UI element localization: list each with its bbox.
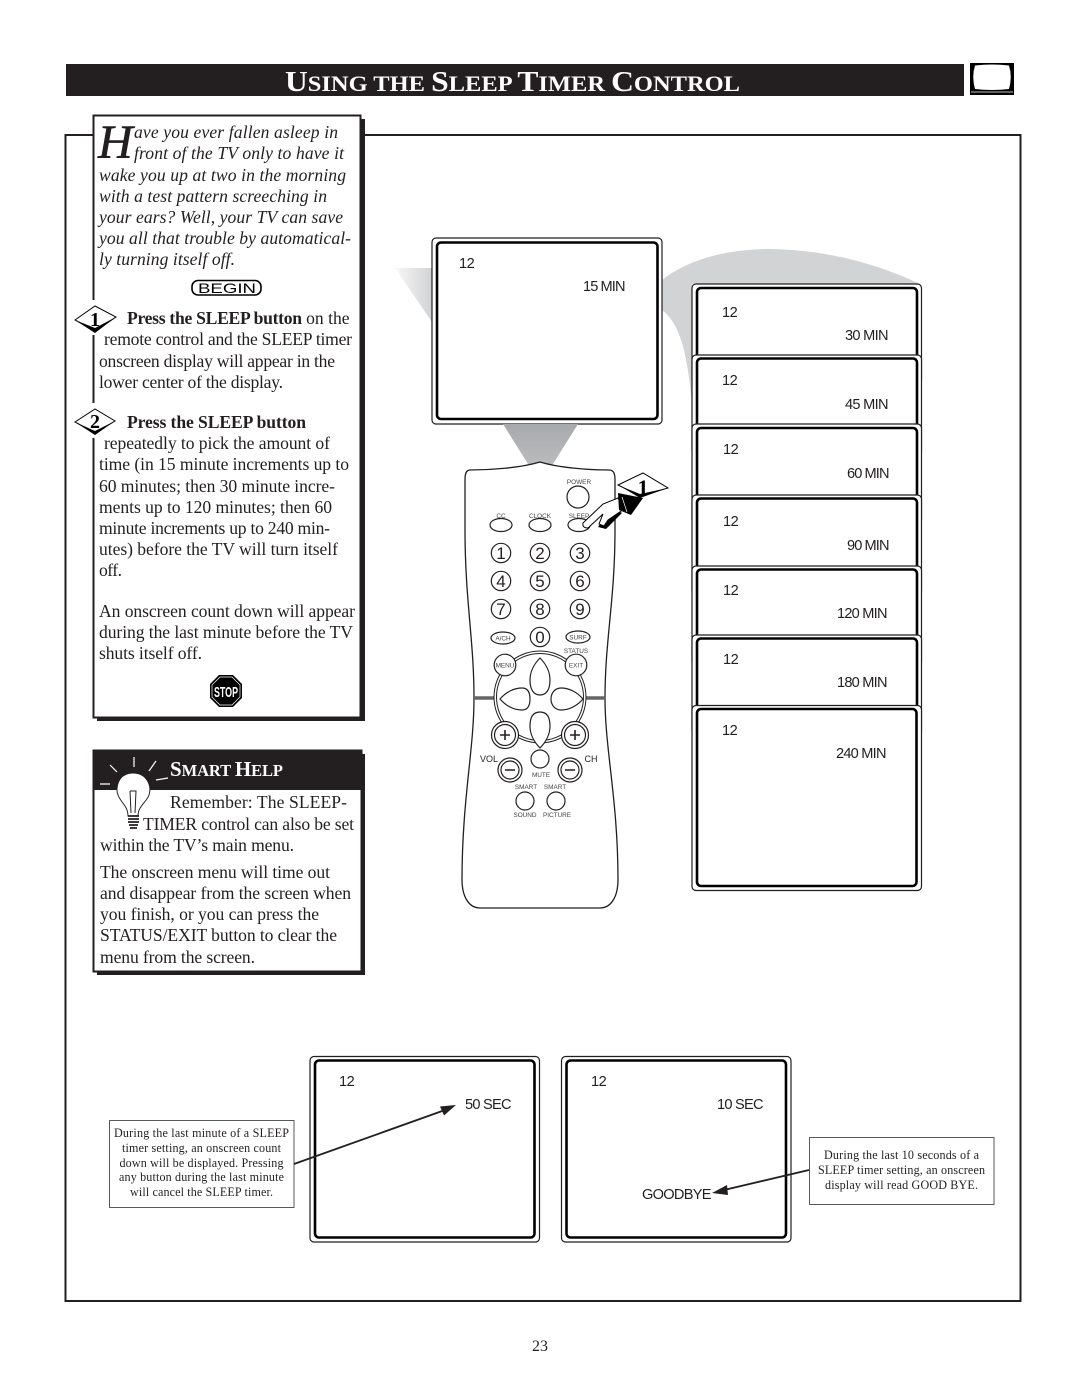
remote number keys: 4 [496,572,506,591]
remote number keys: STATUS [564,648,588,655]
drop cap: H [97,116,135,169]
icon: stop sign: STOP [214,684,238,701]
intro text: ave you ever fallen asleep in [134,122,338,142]
begin label [192,280,261,296]
intro text: you all that trouble by automatical- [97,228,351,248]
intro text: your ears? Well, your TV can save [97,207,343,227]
page number: 23 [532,1338,548,1355]
arrow: to goodbye [712,1170,809,1195]
tv stack: 90 min [692,495,922,595]
remote top buttons: CLOCK [529,513,552,520]
tv stack: 180 min: 12 [723,652,739,668]
step 2 text: 60 minutes; then 30 minute incre- [99,476,335,496]
tv stack: 120 min: 120 MIN [837,606,887,622]
icon: stop sign [210,675,242,707]
remote number keys: 0 [535,628,545,647]
remote volume and channel keys [480,722,598,819]
callout: last 10 seconds: During the last 10 seconds of a [824,1148,980,1162]
tv screen 50 sec: 50 SEC [465,1097,511,1113]
remote number keys: 9 [575,600,585,619]
intro text: wake you up at two in the morning [99,165,346,185]
tv screen 15 min: 12 [459,256,475,272]
countdown note: during the last minute before the TV [99,622,353,642]
tv screen 10 sec goodbye [562,1056,791,1242]
main frame [66,135,1020,1301]
step 1 text [99,308,352,392]
smart help text: and disappear from the screen when [100,883,351,903]
title bar: USING THE SLEEP TIMER CONTROL [285,66,740,98]
countdown note: An onscreen count down will appear [99,601,355,621]
remote number keys: 8 [535,600,545,619]
light beam left [395,268,432,322]
countdown note [99,601,355,663]
tv screen 10 sec goodbye: 10 SEC [717,1097,763,1113]
tv stack: 30 min: 12 [722,305,738,321]
icon: hand pressing sleep [583,493,643,529]
step 2 text: repeatedly to pick the amount of [104,433,330,453]
step 1 marker: 1 [90,309,100,331]
tv stack: 90 min: 12 [723,514,739,530]
callout: last 10 seconds: SLEEP timer setting, an onscreen [818,1163,985,1177]
panel: intro and steps [75,116,365,721]
remote navigation ring: EXIT [569,662,583,670]
step 2 text: utes) before the TV will turn itself [99,539,338,559]
step 1 text: onscreen display will appear in the [99,351,335,371]
remote navigation ring [474,651,605,748]
remote top buttons [490,479,591,532]
tv stack: 180 min [692,635,922,735]
step 2 marker: 2 [90,411,100,433]
intro text: with a test pattern screeching in [99,186,327,206]
step 2 text [99,412,349,580]
remote top buttons: SLEEP [569,513,589,520]
smart help text: Remember: The SLEEP- [170,792,347,812]
remote volume and channel keys: SMART [544,784,566,791]
remote body [462,462,618,908]
light beam to remote [503,424,578,464]
tv stack: 30 min: 30 MIN [845,328,888,344]
tv screen 15 min [432,238,662,424]
remote top buttons: POWER [567,479,591,486]
countdown note: shuts itself off. [99,643,202,663]
step 1 text: Press the SLEEP button on the [127,308,350,328]
remote number keys: SURF [569,634,587,642]
tv stack: 60 min: 12 [723,442,739,458]
callout: last 10 seconds: display will read GOOD BYE. [825,1178,978,1192]
tv screen 15 min: 15 MIN [583,279,625,295]
tv stack: 60 min [692,424,922,524]
remote number keys: 3 [575,544,585,563]
arrow: to 50 sec [294,1105,456,1164]
icon: light bulb [100,757,168,828]
callout: last minute [110,1120,294,1208]
callout: last minute: will cancel the SLEEP timer. [130,1185,273,1199]
tv stack: 45 min: 45 MIN [845,397,888,413]
tv stack: 180 min: 180 MIN [837,675,887,691]
smart help text: within the TV’s main menu. [100,835,294,855]
icon: tv [970,63,1014,95]
smart help text: STATUS/EXIT button to clear the [100,925,337,945]
callout: last minute: any button during the last minute [119,1170,284,1184]
callout: last minute: During the last minute of a SLEEP [114,1126,289,1140]
smart help header [93,750,362,790]
step 1 marker [75,306,116,333]
remote volume and channel keys: PICTURE [543,812,571,819]
remote navigation ring: MENU [496,662,515,670]
tv stack: 30 min [692,284,922,384]
smart help text: menu from the screen. [100,947,255,967]
step 1 text: remote control and the SLEEP timer [104,329,352,349]
step 2 text: time (in 15 minute increments up to [99,454,349,474]
remote number keys [491,543,590,655]
remote volume and channel keys: SMART [515,784,537,791]
remote volume and channel keys: SOUND [513,812,537,819]
remote volume and channel keys: CH [584,754,598,764]
step 2 text: Press the SLEEP button [127,412,306,432]
begin label: BEGIN [198,280,256,296]
step 1 callout marker: 1 [638,475,648,500]
title bar [66,64,964,98]
remote number keys: 6 [575,572,585,591]
smart help text [100,792,354,967]
remote top buttons: CC [496,513,506,520]
tv stack: 45 min: 12 [722,373,738,389]
remote number keys: 7 [496,600,506,619]
remote number keys: A/CH [495,636,511,642]
remote number keys: 2 [535,544,545,563]
tv stack: 240 min [692,706,922,890]
remote number keys: 5 [535,572,545,591]
smart help text: The onscreen menu will time out [100,862,330,882]
step 2 text: off. [99,560,122,580]
tv stack: 240 min: 12 [722,723,738,739]
tv screen 50 sec [310,1056,540,1242]
smart help text: you finish, or you can press the [100,904,319,924]
panel: smart help [93,750,365,975]
remote control [462,462,618,908]
tv stack: 240 min: 240 MIN [836,746,886,762]
step 2 marker [75,409,115,435]
tv screen 10 sec goodbye: GOODBYE [642,1187,712,1203]
smart help header: SMART HELP [170,757,283,781]
step 2 text: minute increments up to 240 min- [99,518,330,538]
tv stack: 120 min [692,566,922,666]
tv screen 10 sec goodbye: 12 [591,1074,607,1090]
tv stack: 60 min: 60 MIN [847,466,889,482]
intro text [97,122,351,269]
step 1 text: lower center of the display. [99,372,283,392]
light beam right [662,249,920,405]
remote number keys: 1 [496,544,506,563]
step 1 callout marker [618,473,668,500]
intro text: ly turning itself off. [99,249,235,269]
tv stack: 90 min: 90 MIN [847,538,889,554]
callout: last minute: down will be displayed. Pressing [120,1156,284,1170]
remote volume and channel keys: VOL [480,754,498,764]
callout: last minute: timer setting, an onscreen count [122,1141,282,1155]
remote volume and channel keys: MUTE [532,772,550,779]
tv screen 50 sec: 12 [339,1074,355,1090]
tv stack: 120 min: 12 [723,583,739,599]
intro text: front of the TV only to have it [134,143,345,163]
tv stack: 45 min [692,355,922,455]
callout: last 10 seconds [810,1138,994,1204]
step 2 text: ments up to 120 minutes; then 60 [99,497,332,517]
smart help text: TIMER control can also be set [143,814,354,834]
